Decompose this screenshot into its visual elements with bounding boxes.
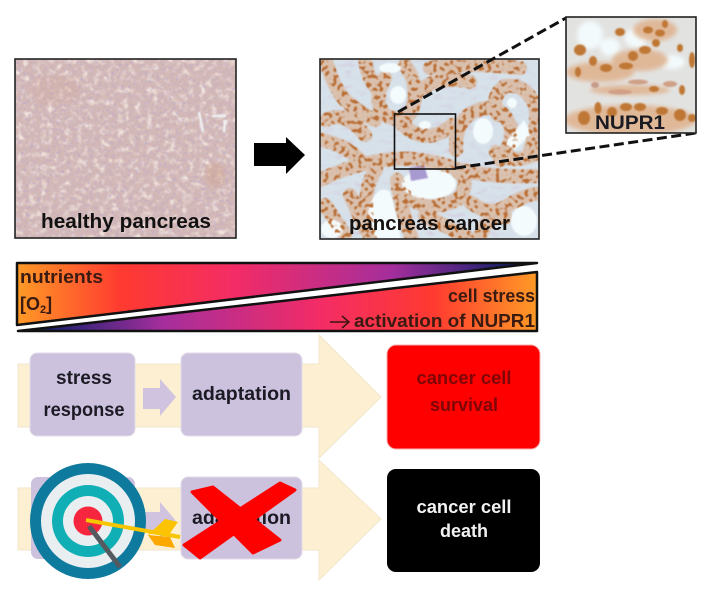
box: adaptation blocked: adaptation (192, 508, 291, 529)
box: stress response: stress (56, 368, 112, 389)
panel: healthy pancreas micrograph (15, 59, 236, 238)
box: adaptation: adaptation (192, 384, 291, 405)
row 1: large arrow (18, 335, 381, 458)
label: oxygen: ] (46, 294, 52, 314)
box: stress response hidden behind target (31, 477, 135, 559)
label: NUPR1: NUPR1 (595, 113, 665, 134)
label: oxygen: [O (20, 294, 40, 314)
box: stress response: response (44, 400, 124, 421)
box: cancer cell death (387, 469, 540, 572)
gradient wedge: nutrients and oxygen (17, 263, 537, 325)
arrow: healthy to cancer (254, 137, 305, 174)
box: adaptation blocked (181, 477, 302, 559)
small arrow row 2 (143, 502, 176, 540)
box: adaptation (181, 353, 302, 436)
label: activation of NUPR1: activation of NUPR1 (354, 311, 535, 331)
row 2: large arrow (18, 460, 381, 580)
box: cancer cell survival: survival (430, 395, 498, 415)
icon: red cross (184, 483, 295, 558)
box: cancer cell death: cancer cell (416, 497, 512, 517)
label: healthy pancreas: healthy pancreas (41, 211, 211, 233)
small arrow row 1 (143, 379, 176, 416)
icon: target with dart (30, 463, 180, 579)
arrow: leads to (330, 316, 349, 328)
panel: NUPR1 inset (564, 17, 696, 135)
lumens (321, 63, 537, 239)
gradient wedge: cell stress (18, 272, 537, 331)
epithelium tint (320, 60, 539, 239)
box: cancer cell survival: cancer cell (416, 368, 512, 388)
label: nutrients: nutrients (20, 267, 103, 287)
label: oxygen: 2 (40, 304, 46, 316)
box: stress response (30, 353, 135, 436)
label: pancreas cancer: pancreas cancer (349, 213, 510, 235)
dashed zoom lines (398, 18, 696, 168)
zoom box on cancer image (394, 114, 456, 169)
panel: pancreas cancer micrograph (320, 59, 539, 239)
label: cell stress: cell stress (448, 286, 535, 306)
box: cancer cell survival (387, 345, 540, 449)
box: cancer cell death: death (440, 521, 488, 541)
brown nuclei (320, 60, 539, 239)
